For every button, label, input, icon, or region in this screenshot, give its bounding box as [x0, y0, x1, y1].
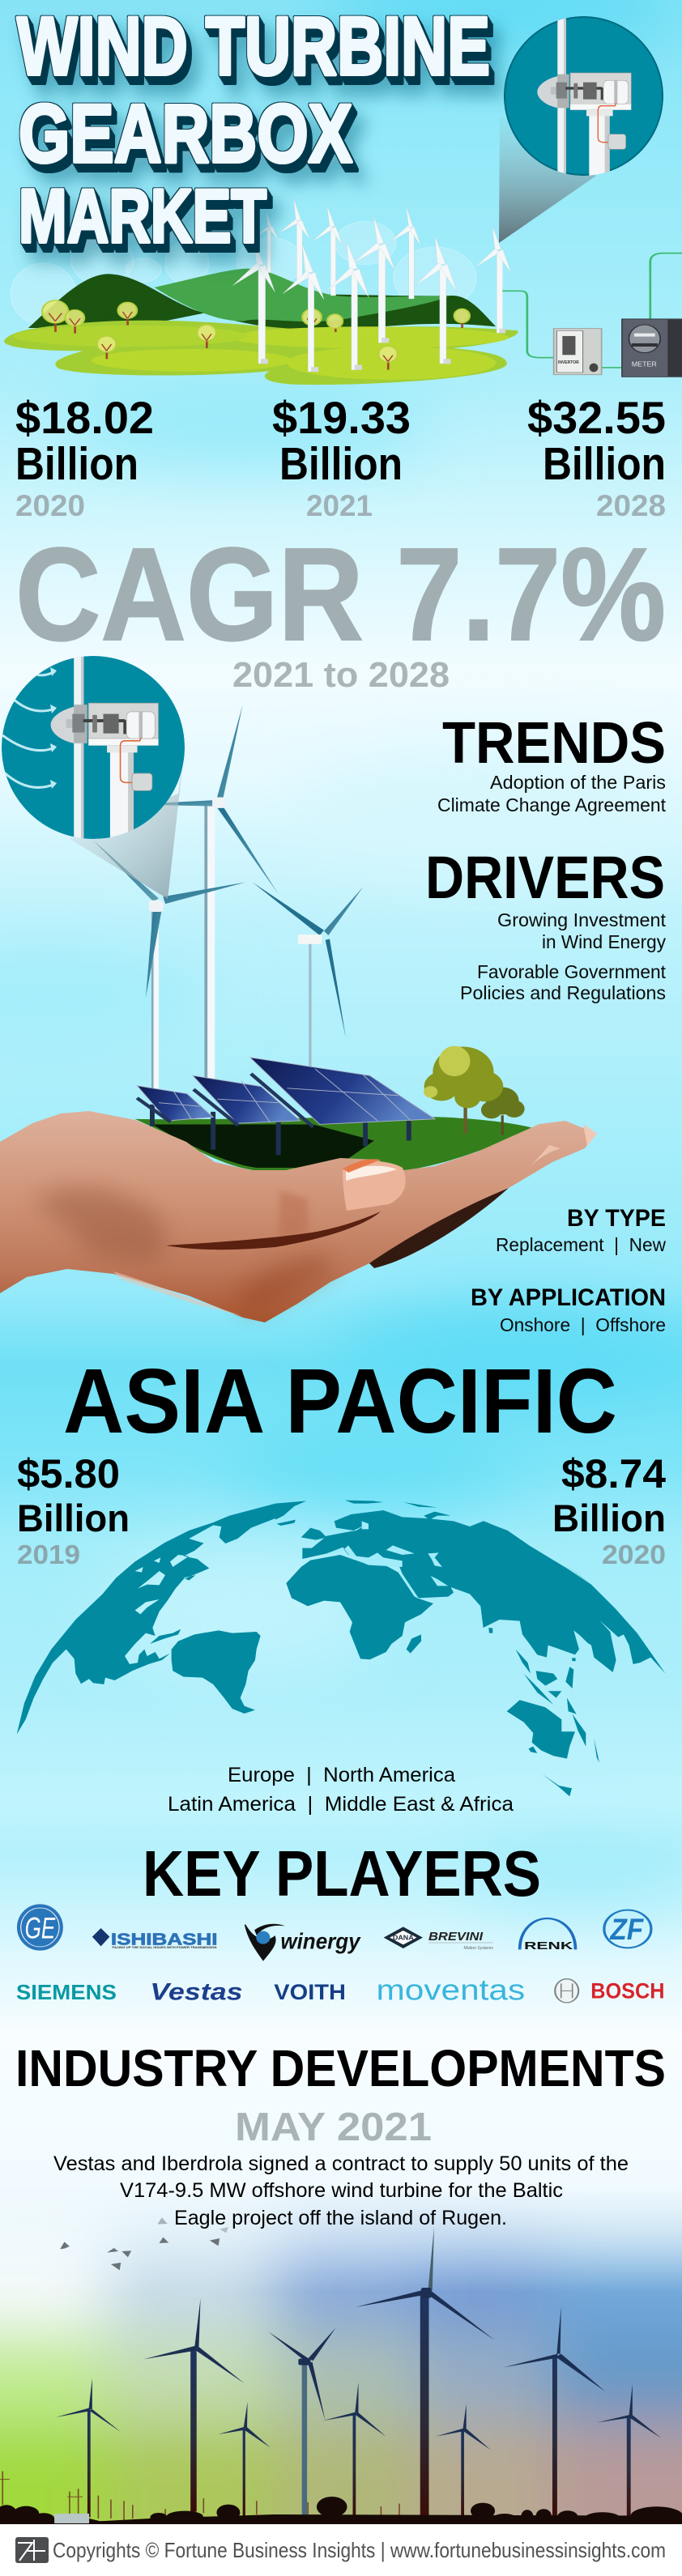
drivers: Growing Investment: [497, 909, 667, 930]
stat: asia pacific 2019: Billion: [17, 1497, 130, 1539]
drivers: Policies and Regulations: [460, 982, 666, 1003]
key players heading: KEY PLAYERS: [143, 1837, 541, 1910]
british isles: [301, 1528, 326, 1540]
segment: by application: [471, 1284, 666, 1335]
region heading: ASIA PACIFIC: [63, 1350, 617, 1452]
small trees: [42, 300, 470, 370]
new zealand and pacific islets: [483, 1520, 599, 1796]
greenland edge and iceland: [275, 1501, 306, 1526]
seas: [320, 1521, 448, 1598]
footer: [0, 2524, 682, 2576]
segment: by type: Replacement | New: [496, 1234, 666, 1255]
logo: Siemens: SIEMENS: [16, 1981, 117, 2004]
hero illustration: wind farm: [4, 198, 682, 385]
caribbean: [150, 1629, 181, 1644]
solar panels: [137, 1058, 435, 1155]
logo: Ishibashi: FACING UP THE SOCIAL ISSUES WITH POWER TRANSMISSION: [113, 1946, 217, 1949]
logo: Bosch: [555, 1979, 665, 2003]
development text: Eagle project off the island of Rugen.: [174, 2207, 507, 2229]
arctic islands: [345, 1501, 451, 1520]
eurasia: [302, 1510, 666, 1674]
stat: 2020: $18.02: [15, 392, 154, 443]
callout cone: [499, 116, 596, 243]
stat: asia pacific 2019: $5.80: [17, 1451, 120, 1497]
drivers: Favorable Government: [477, 961, 667, 982]
logos: [16, 1904, 665, 2007]
stat: asia pacific 2020: $8.74: [561, 1451, 666, 1497]
power cables: [502, 253, 682, 368]
other regions: [168, 1764, 514, 1816]
stat: 2020: [15, 392, 154, 522]
logo: Winergy: [245, 1924, 361, 1961]
logo: ZF: ZF: [609, 1913, 645, 1946]
stat: asia pacific 2020: Billion: [552, 1497, 666, 1539]
grass island: [134, 1117, 533, 1172]
stat: asia pacific 2019: 2019: [17, 1539, 80, 1569]
hand: [0, 1111, 597, 1322]
logo: Moventas: moventas: [377, 1974, 525, 2007]
birds: [60, 2217, 228, 2270]
southeast asia islands: [516, 1650, 586, 1747]
logo: Ishibashi: [92, 1928, 218, 1949]
trends: TRENDS: [442, 711, 666, 776]
title: MARKET: [19, 173, 266, 258]
logo: Winergy: winergy: [280, 1929, 361, 1954]
stat: 2021: Billion: [279, 438, 403, 490]
title: GEARBOX: [19, 87, 352, 180]
electric meter: [622, 319, 682, 377]
logo: Dana Brevini: Motion Systems: [463, 1945, 493, 1950]
CAGR: 2021 to 2028: [232, 655, 450, 695]
stat: asia pacific 2019: [17, 1451, 130, 1569]
development text: Vestas and Iberdrola signed a contract to supply 50 units of the: [53, 2152, 629, 2175]
logo: Vestas: Vestas: [150, 1978, 243, 2005]
title: WIND TURBINE: [17, 0, 490, 92]
logo: Dana Brevini: BREVINI: [428, 1930, 484, 1944]
world map: [17, 1501, 666, 1796]
stat: asia pacific 2020: [552, 1451, 666, 1569]
inverter box: [554, 329, 602, 375]
solar panels and grass on the palm: [134, 1046, 533, 1172]
segment: by application: BY APPLICATION: [471, 1284, 666, 1311]
blades: [56, 2227, 661, 2450]
logo: ZF: [604, 1910, 651, 1948]
photo turbines: [93, 705, 363, 1090]
development text: V174-9.5 MW offshore wind turbine for the Baltic: [120, 2179, 563, 2202]
other regions: Europe | North America: [228, 1764, 455, 1786]
western hemisphere: [17, 1504, 275, 1735]
date: MAY 2021: [235, 2106, 432, 2149]
tall turbine: [130, 705, 279, 1088]
utility poles: [0, 2472, 399, 2521]
right turbine: [252, 882, 363, 1068]
clouds: [11, 221, 476, 326]
stat: 2021: 2021: [306, 489, 373, 522]
silhouette turbines: [87, 2292, 631, 2520]
stat: 2020: Billion: [15, 438, 139, 490]
logo: Dana Brevini: DANA: [393, 1935, 414, 1942]
roadside building: [54, 2514, 89, 2523]
africa: [286, 1555, 433, 1659]
sri lanka and taiwan: [488, 1628, 576, 1661]
south america: [172, 1630, 261, 1714]
trends: Climate Change Agreement: [437, 794, 667, 815]
stat: 2028: [527, 392, 666, 522]
trends: [437, 711, 667, 815]
trends: Adoption of the Paris: [490, 772, 666, 793]
airflow gearbox circle: [2, 656, 185, 839]
madagascar: [407, 1634, 421, 1654]
ground: [4, 321, 518, 385]
footer logo: [15, 2537, 49, 2563]
segment: by type: BY TYPE: [567, 1205, 666, 1232]
stat: 2028: 2028: [596, 489, 666, 522]
mid turbine tower: [302, 2363, 307, 2514]
callout cone 2: [70, 747, 185, 899]
stat: asia pacific 2020: 2020: [602, 1539, 666, 1569]
stat: 2028: $32.55: [527, 392, 666, 443]
stat: 2028: Billion: [543, 438, 666, 490]
inverter box: INVERTOR: [558, 360, 579, 364]
logo: GE: [17, 1904, 63, 1951]
thumbnail: [343, 1124, 597, 1211]
development text: [53, 2152, 629, 2229]
left turbine: [93, 841, 245, 1090]
logo: Ishibashi: ISHIBASHI: [111, 1931, 218, 1948]
stat: 2021: $19.33: [272, 392, 411, 443]
logo: Dana Brevini: [384, 1927, 493, 1950]
drivers: in Wind Energy: [542, 931, 666, 952]
hand shading: [32, 1186, 509, 1316]
segment: by type: [496, 1205, 666, 1255]
stat: 2020: 2020: [15, 489, 85, 522]
eastern hemisphere: [275, 1501, 666, 1796]
australia: [507, 1700, 575, 1759]
logo: Voith: VOITH: [274, 1980, 346, 2004]
drivers: [425, 844, 667, 1003]
electric meter: METER: [632, 361, 657, 368]
logo: GE: GE: [25, 1912, 56, 1945]
stat: 2021: [272, 392, 411, 522]
gearbox detail circle: [504, 16, 663, 176]
hills: [28, 269, 496, 330]
tree line: [0, 2497, 682, 2525]
segment: by application: Onshore | Offshore: [500, 1314, 666, 1335]
other regions: Latin America | Middle East & Africa: [168, 1793, 514, 1816]
logo: Renk: RENK: [524, 1939, 573, 1952]
white turbines: [232, 198, 511, 372]
blended sky: [0, 2196, 682, 2522]
bottom scene: sky and turbines: [0, 2196, 682, 2524]
title: [17, 0, 490, 258]
logo: Renk: [520, 1918, 575, 1952]
trees: [424, 1046, 525, 1135]
north america: [17, 1504, 275, 1735]
